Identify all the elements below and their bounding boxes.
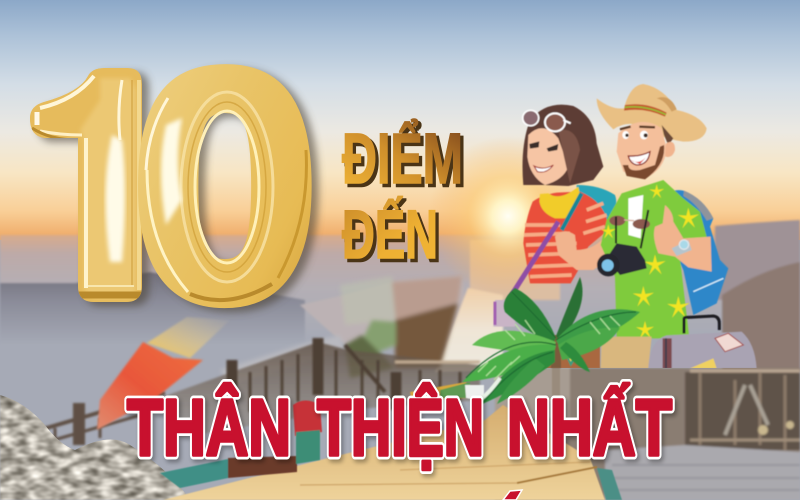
woman's face [527,128,568,185]
woman's striped shirt [523,192,607,283]
box [546,346,601,368]
heading: ĐIỂM ĐẾN [342,119,466,276]
heading: ĐIỂM ĐẾN: ĐẾN [345,199,441,276]
title fill: THIỆN [317,383,484,472]
heading: ĐIỂM ĐẾN: ĐIỂM [342,119,463,199]
palm fronds [462,277,640,405]
title fill: THÂN [127,383,291,472]
title fill [127,383,672,472]
woman's backpack [577,185,616,220]
title shadow: NHẤT [509,386,674,475]
title outline [127,383,672,472]
woman's camera strap and bag [493,222,558,327]
title outline: THIỆN [317,383,484,472]
shadow of 10 [37,7,325,371]
background: mountains [0,220,800,500]
title outline: THÂN [127,383,291,472]
digit 0: 0 [132,3,318,367]
man's green shirt [601,180,707,338]
woman's scarf [539,187,580,218]
title fill: NHẤT [507,383,672,472]
woman's hair back [522,105,603,186]
title: THÂN THIỆN NHẤT [127,383,674,475]
illustration: tourist couple [493,84,757,368]
title outline: NHẤT [507,383,672,472]
man's trousers [601,337,652,368]
number 10 [30,63,324,316]
title shadow [129,386,674,475]
shadow of 10: 0 [139,7,325,371]
rubble mound [0,390,195,500]
man's head [617,122,675,179]
woman's backpack strap [562,193,582,230]
title shadow: THIỆN [319,386,486,475]
digit 1 [30,68,142,302]
heading: ĐIỂM ĐẾN: ĐIỂM [345,122,466,202]
woman's sunglasses [523,110,571,131]
man's backpack [674,189,729,316]
man's arm and thumbs up [654,205,712,272]
woman's hand [555,231,612,270]
faded cliff [220,276,462,385]
heading: ĐIỂM ĐẾN: ĐẾN [342,196,438,273]
palm tree [462,277,640,405]
teal frond and parrot behind title [160,382,484,488]
suitcase [648,316,757,368]
red kite [97,317,230,430]
title shadow: THÂN [129,386,293,475]
hanging sunglasses [609,216,650,229]
cropped next line of title [503,490,522,500]
background: sky [0,0,800,240]
wooden board [163,405,622,500]
railing [40,338,800,500]
left fence [40,393,165,446]
man's hat [597,84,707,142]
sun [428,136,588,296]
camera [597,210,648,276]
